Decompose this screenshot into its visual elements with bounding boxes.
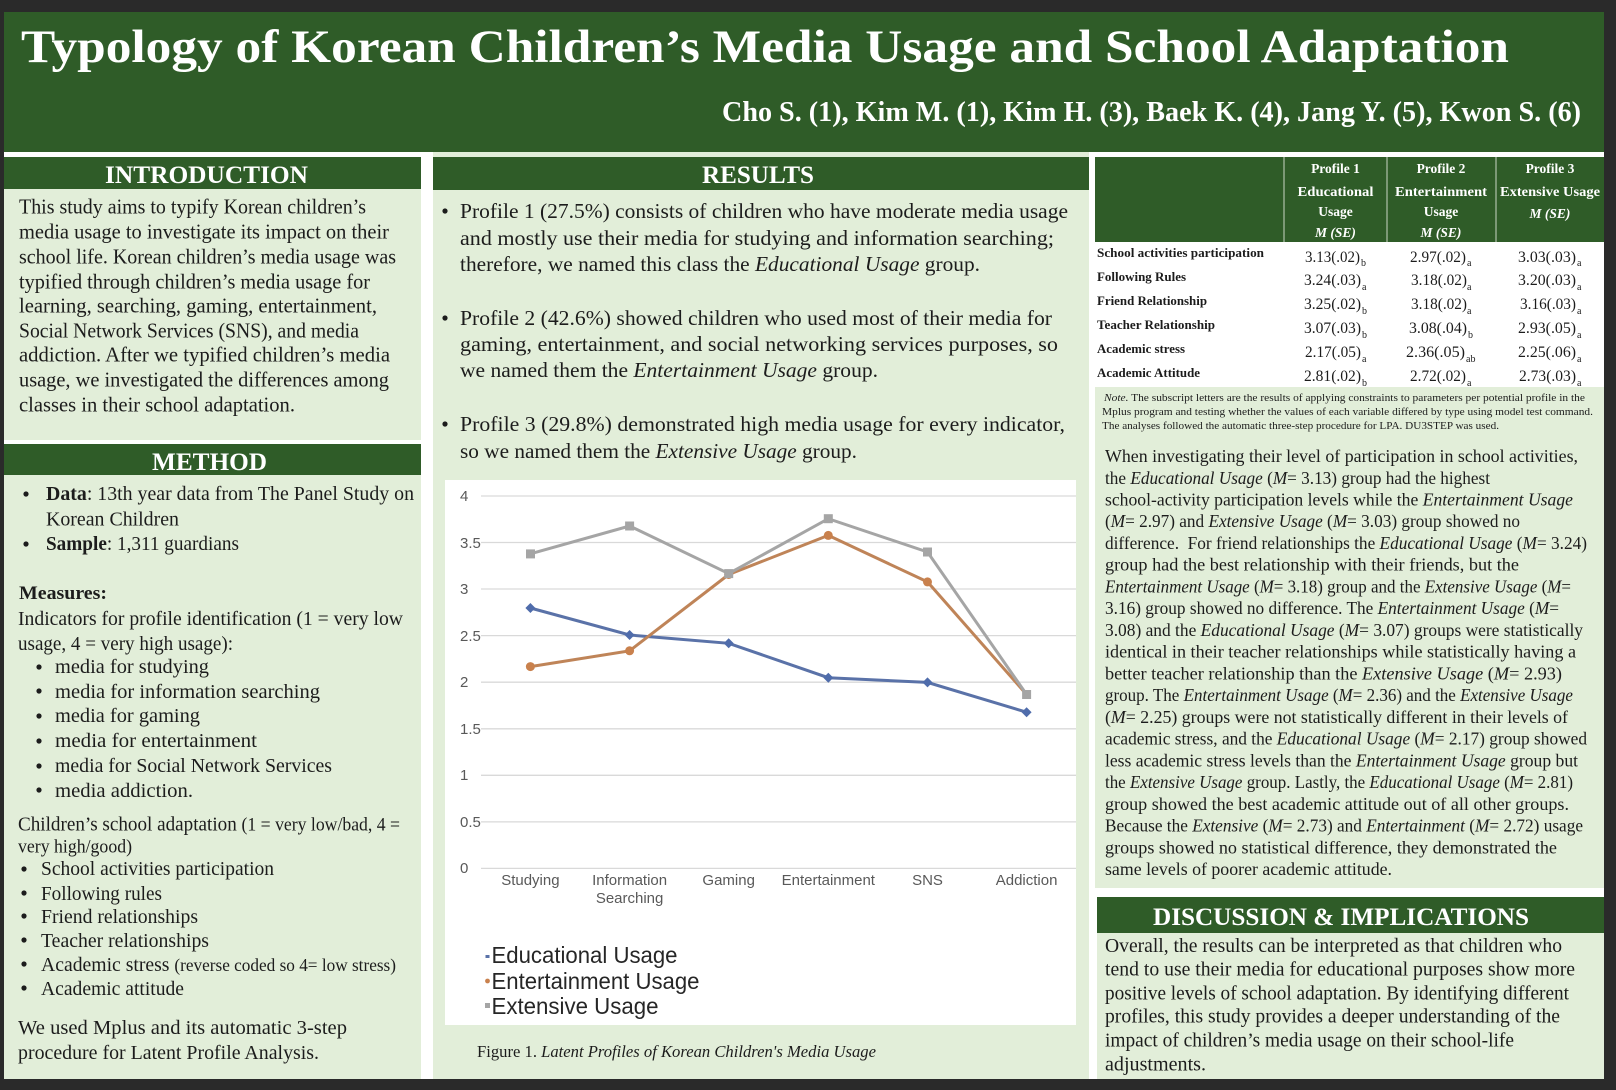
y-axis labels — [460, 488, 481, 877]
table note — [1102, 392, 1593, 432]
school adaptation findings — [1104, 446, 1587, 879]
data and sample: Sample: 1,311 guardians — [46, 533, 239, 555]
table values: 2.93(.05) — [1518, 320, 1576, 337]
table values — [1304, 249, 1582, 389]
table values: a — [1577, 354, 1582, 365]
row labels: School activities participation — [1097, 246, 1264, 260]
table values: 2.36(.05) — [1406, 344, 1465, 361]
measures: school adaptation: Academic stress (reverse coded so 4= low stress) — [41, 954, 396, 976]
school adaptation findings: 3.16) group showed no difference. The Entertainment Usage (M= — [1105, 598, 1559, 619]
measures: school adaptation: School activities participation — [41, 858, 274, 880]
y-axis labels: 0.5 — [460, 814, 481, 831]
series: entertainment usage — [526, 531, 1027, 694]
table values: 3.08(.04) — [1409, 320, 1467, 337]
legend: Educational Usage — [492, 942, 678, 968]
measures: indicators: media for Social Network Services — [55, 755, 332, 777]
y-axis labels: 2 — [460, 674, 468, 691]
legend — [485, 942, 700, 1019]
table values: 2.73(.03) — [1519, 368, 1576, 385]
legend: Entertainment Usage — [492, 968, 700, 994]
row labels: Academic Attitude — [1097, 366, 1200, 380]
row labels: Academic stress — [1097, 342, 1185, 356]
y-axis labels: 3.5 — [460, 535, 481, 552]
profile 1: therefore, we named this class the Educational Usage group. — [460, 252, 980, 276]
discussion text: adjustments. — [1105, 1054, 1206, 1076]
table values: b — [1468, 330, 1473, 341]
x-axis labels: Gaming — [702, 872, 755, 889]
table values: 2.72(.02) — [1410, 368, 1466, 385]
data and sample: Data: 13th year data from The Panel Study on — [46, 483, 414, 505]
table values: a — [1362, 354, 1367, 365]
table values: 2.81(.02) — [1304, 368, 1361, 385]
profile 2: Profile 2 (42.6%) showed children who used most of their media for — [460, 306, 1052, 330]
table values: 2.97(.02) — [1410, 249, 1466, 266]
table values: 3.18(.02) — [1411, 272, 1467, 289]
measures: indicators: Measures: — [19, 583, 107, 604]
introduction text: Social Network Services (SNS), and media — [19, 318, 360, 342]
table values: 3.24(.03) — [1304, 272, 1361, 289]
line chart: latent profiles — [445, 480, 1076, 1025]
introduction text: classes in their school adaptation. — [19, 392, 295, 416]
x-axis labels — [501, 872, 1057, 907]
measures: school adaptation: Following rules — [41, 883, 162, 905]
x-axis labels: Searching — [596, 890, 663, 907]
title: Typology of Korean Children’s Media Usage and School Adaptation — [21, 21, 1509, 73]
introduction text: This study aims to typify Korean children’s — [19, 194, 366, 218]
table values: b — [1362, 330, 1367, 341]
profile 2 — [442, 306, 1058, 382]
table header: Educational — [1298, 184, 1374, 199]
school adaptation findings: group showed the best academic attitude out of all other groups. — [1105, 794, 1569, 814]
table values: 3.18(.02) — [1411, 296, 1467, 313]
discussion text: profiles, this study provides a deeper understanding of the — [1105, 1006, 1560, 1028]
x-axis labels: Addiction — [996, 872, 1057, 889]
table note: Mplus program and testing whether the values of each variable differed by type using model test command. — [1102, 406, 1593, 418]
authors: Cho S. (1), Kim M. (1), Kim H. (3), Baek K. (4), Jang Y. (5), Kwon S. (6) — [722, 97, 1581, 128]
table values: 3.20(.03) — [1518, 272, 1576, 289]
y-axis labels: 3 — [460, 581, 468, 598]
table values: a — [1467, 282, 1472, 293]
school adaptation findings: Because the Extensive (M= 2.73) and Entertainment (M= 2.72) usage — [1105, 816, 1583, 837]
table values: 3.16(.03) — [1520, 296, 1576, 313]
introduction text: media usage to investigate its impact on their — [19, 220, 389, 244]
row labels — [1097, 246, 1264, 380]
school adaptation findings: the Educational Usage (M= 3.13) group had the highest — [1105, 468, 1490, 489]
measures: indicators: media for information searching — [55, 681, 320, 703]
school adaptation findings: the Extensive Usage group. Lastly, the Educational Usage (M= 2.81) — [1105, 772, 1573, 793]
table values: a — [1577, 330, 1582, 341]
table header: Extensive Usage — [1500, 184, 1600, 199]
measures: school adaptation: Academic attitude — [41, 978, 184, 1000]
table values: a — [1362, 282, 1367, 293]
measures: indicators: media for gaming — [55, 705, 200, 727]
table values: a — [1467, 306, 1472, 317]
school adaptation findings: school-activity participation levels while the Entertainment Usage — [1105, 490, 1573, 510]
measures: indicators — [18, 583, 404, 802]
x-axis labels: SNS — [912, 872, 943, 889]
discussion text — [1105, 935, 1575, 1076]
table values: 2.25(.06) — [1518, 344, 1576, 361]
legend: Extensive Usage — [492, 993, 658, 1019]
introduction text — [19, 194, 396, 416]
introduction text: addiction. After we typified children’s media — [19, 342, 391, 366]
table header: Usage — [1318, 204, 1353, 219]
profile 1: and mostly use their media for studying and information searching; — [460, 226, 1054, 250]
table header: M (SE) — [1529, 206, 1570, 221]
table values: ab — [1466, 354, 1475, 365]
school adaptation findings: (M= 2.97) and Extensive Usage (M= 3.03) group showed no — [1105, 511, 1520, 532]
table: school adaptation by profile — [1095, 157, 1604, 389]
table values: a — [1577, 282, 1582, 293]
panel: method — [4, 444, 421, 1079]
panel: introduction — [4, 157, 421, 440]
profile 2: gaming, entertainment, and social networking services purposes, so — [460, 332, 1058, 356]
data and sample — [23, 483, 414, 555]
school adaptation findings: group had the best relationship with their friends, but the — [1105, 555, 1519, 575]
panel: results — [433, 152, 1089, 1079]
table header: Profile 3 — [1526, 161, 1575, 176]
y-axis labels: 0 — [460, 860, 468, 877]
row labels: Following Rules — [1097, 270, 1186, 284]
school adaptation findings: When investigating their level of participation in school activities, — [1105, 446, 1578, 466]
school adaptation findings: same levels of poorer academic attitude. — [1105, 859, 1392, 879]
measures: school adaptation: Friend relationships — [41, 906, 198, 928]
profile 2: we named them the Entertainment Usage group. — [460, 358, 878, 382]
measures: indicators: usage, 4 = very high usage): — [18, 633, 233, 655]
profile 1 — [442, 199, 1068, 276]
measures: school adaptation: Children’s school adaptation (1 = very low/bad, 4 = — [18, 814, 400, 836]
table values: 3.07(.03) — [1304, 320, 1361, 337]
discussion text: positive levels of school adaptation. By identifying different — [1105, 982, 1569, 1004]
measures: school adaptation: Teacher relationships — [41, 930, 209, 952]
measures: indicators: media for entertainment — [55, 730, 257, 752]
table note: Note. The subscript letters are the results of applying constraints to parameters per potential profile in the — [1103, 392, 1585, 404]
school adaptation findings: academic stress, and the Educational Usage (M= 2.17) group showed — [1105, 729, 1587, 750]
table header: M (SE) — [1314, 225, 1356, 240]
heading: results: RESULTS — [702, 162, 814, 189]
school adaptation findings: difference. For friend relationships the Educational Usage (M= 3.24) — [1105, 533, 1587, 554]
table header: M (SE) — [1420, 225, 1461, 240]
discussion text: tend to use their media for educational purposes show more — [1105, 958, 1575, 980]
school adaptation findings: group. The Entertainment Usage (M= 2.36) and the Extensive Usage — [1105, 685, 1573, 706]
school adaptation findings: groups showed no statistical difference, they demonstrated the — [1105, 838, 1557, 858]
figure caption: Figure 1. Latent Profiles of Korean Children's Media Usage — [477, 1042, 876, 1061]
table values: a — [1467, 258, 1472, 269]
profile 3: Profile 3 (29.8%) demonstrated high media usage for every indicator, — [460, 412, 1065, 436]
discussion text: Overall, the results can be interpreted as that children who — [1105, 935, 1562, 957]
panel: discussion and implications — [1097, 897, 1604, 1079]
y-axis labels: 2.5 — [460, 628, 481, 645]
school adaptation findings: 3.08) and the Educational Usage (M= 3.07) groups were statistically — [1105, 620, 1584, 641]
analysis note — [18, 1017, 347, 1064]
table values: a — [1467, 378, 1472, 389]
header banner — [4, 12, 1604, 152]
table header: Entertainment — [1395, 184, 1488, 199]
measures: indicators: Indicators for profile identification (1 = very low — [18, 608, 404, 630]
table values: a — [1577, 306, 1582, 317]
table values: b — [1361, 258, 1366, 269]
school adaptation findings: Entertainment Usage (M= 3.18) group and the Extensive Usage (M= — [1104, 576, 1571, 598]
table header — [1298, 161, 1600, 240]
profile 3 — [442, 412, 1065, 463]
heading: method: METHOD — [152, 449, 267, 476]
heading: introduction: INTRODUCTION — [105, 162, 308, 189]
panel: results discussion text — [1095, 387, 1604, 888]
y-axis labels: 1.5 — [460, 721, 481, 738]
analysis note: procedure for Latent Profile Analysis. — [18, 1042, 319, 1064]
table note: The analyses followed the automatic three-step procedure for LPA. DU3STEP was used. — [1102, 420, 1499, 432]
table header: Usage — [1424, 204, 1458, 219]
table values: b — [1362, 306, 1367, 317]
row labels: Friend Relationship — [1097, 294, 1207, 308]
school adaptation findings: (M= 2.25) groups were not statistically different in their levels of — [1105, 707, 1569, 728]
series: educational usage — [525, 603, 1032, 717]
x-axis labels: Entertainment — [782, 872, 876, 889]
discussion text: impact of children’s media usage on their school-life — [1105, 1030, 1514, 1052]
x-axis labels: Studying — [501, 872, 560, 889]
y-axis labels: 1 — [460, 767, 468, 784]
analysis note: We used Mplus and its automatic 3-step — [18, 1017, 347, 1039]
table values: 3.03(.03) — [1518, 249, 1576, 266]
measures: indicators: media addiction. — [55, 780, 193, 802]
heading: discussion and implications: DISCUSSION & IMPLICATIONS — [1153, 904, 1529, 931]
school adaptation findings: better teacher relationship than the Extensive Usage (M= 2.93) — [1105, 664, 1562, 684]
table values: 2.17(.05) — [1305, 344, 1361, 361]
table header: Profile 1 — [1311, 161, 1360, 176]
y-axis labels: 4 — [460, 488, 468, 505]
table header: Profile 2 — [1417, 161, 1466, 176]
introduction text: usage, we investigated the differences among — [19, 368, 389, 392]
introduction text: learning, searching, gaming, entertainment, — [19, 294, 377, 318]
profile 1: Profile 1 (27.5%) consists of children who have moderate media usage — [460, 199, 1068, 223]
school adaptation findings: identical in their teacher relationships while statistically having a — [1105, 642, 1576, 662]
data and sample: Korean Children — [46, 508, 179, 530]
table values: 3.25(.02) — [1304, 296, 1361, 313]
introduction text: typified through children’s media usage for — [19, 270, 370, 294]
measures: school adaptation — [18, 814, 400, 1000]
x-axis labels: Information — [592, 872, 667, 889]
table values: a — [1577, 378, 1582, 389]
measures: indicators: media for studying — [55, 656, 209, 678]
row labels: Teacher Relationship — [1097, 318, 1215, 332]
table values: 3.13(.02) — [1305, 249, 1360, 266]
measures: school adaptation: very high/good) — [18, 838, 132, 858]
profile 3: so we named them the Extensive Usage group. — [460, 439, 857, 463]
school adaptation findings: less academic stress levels than the Entertainment Usage group but — [1105, 750, 1578, 770]
table values: a — [1577, 258, 1582, 269]
table values: b — [1362, 378, 1367, 389]
introduction text: school life. Korean children’s media usage was — [19, 244, 396, 268]
series: extensive usage — [526, 514, 1031, 699]
